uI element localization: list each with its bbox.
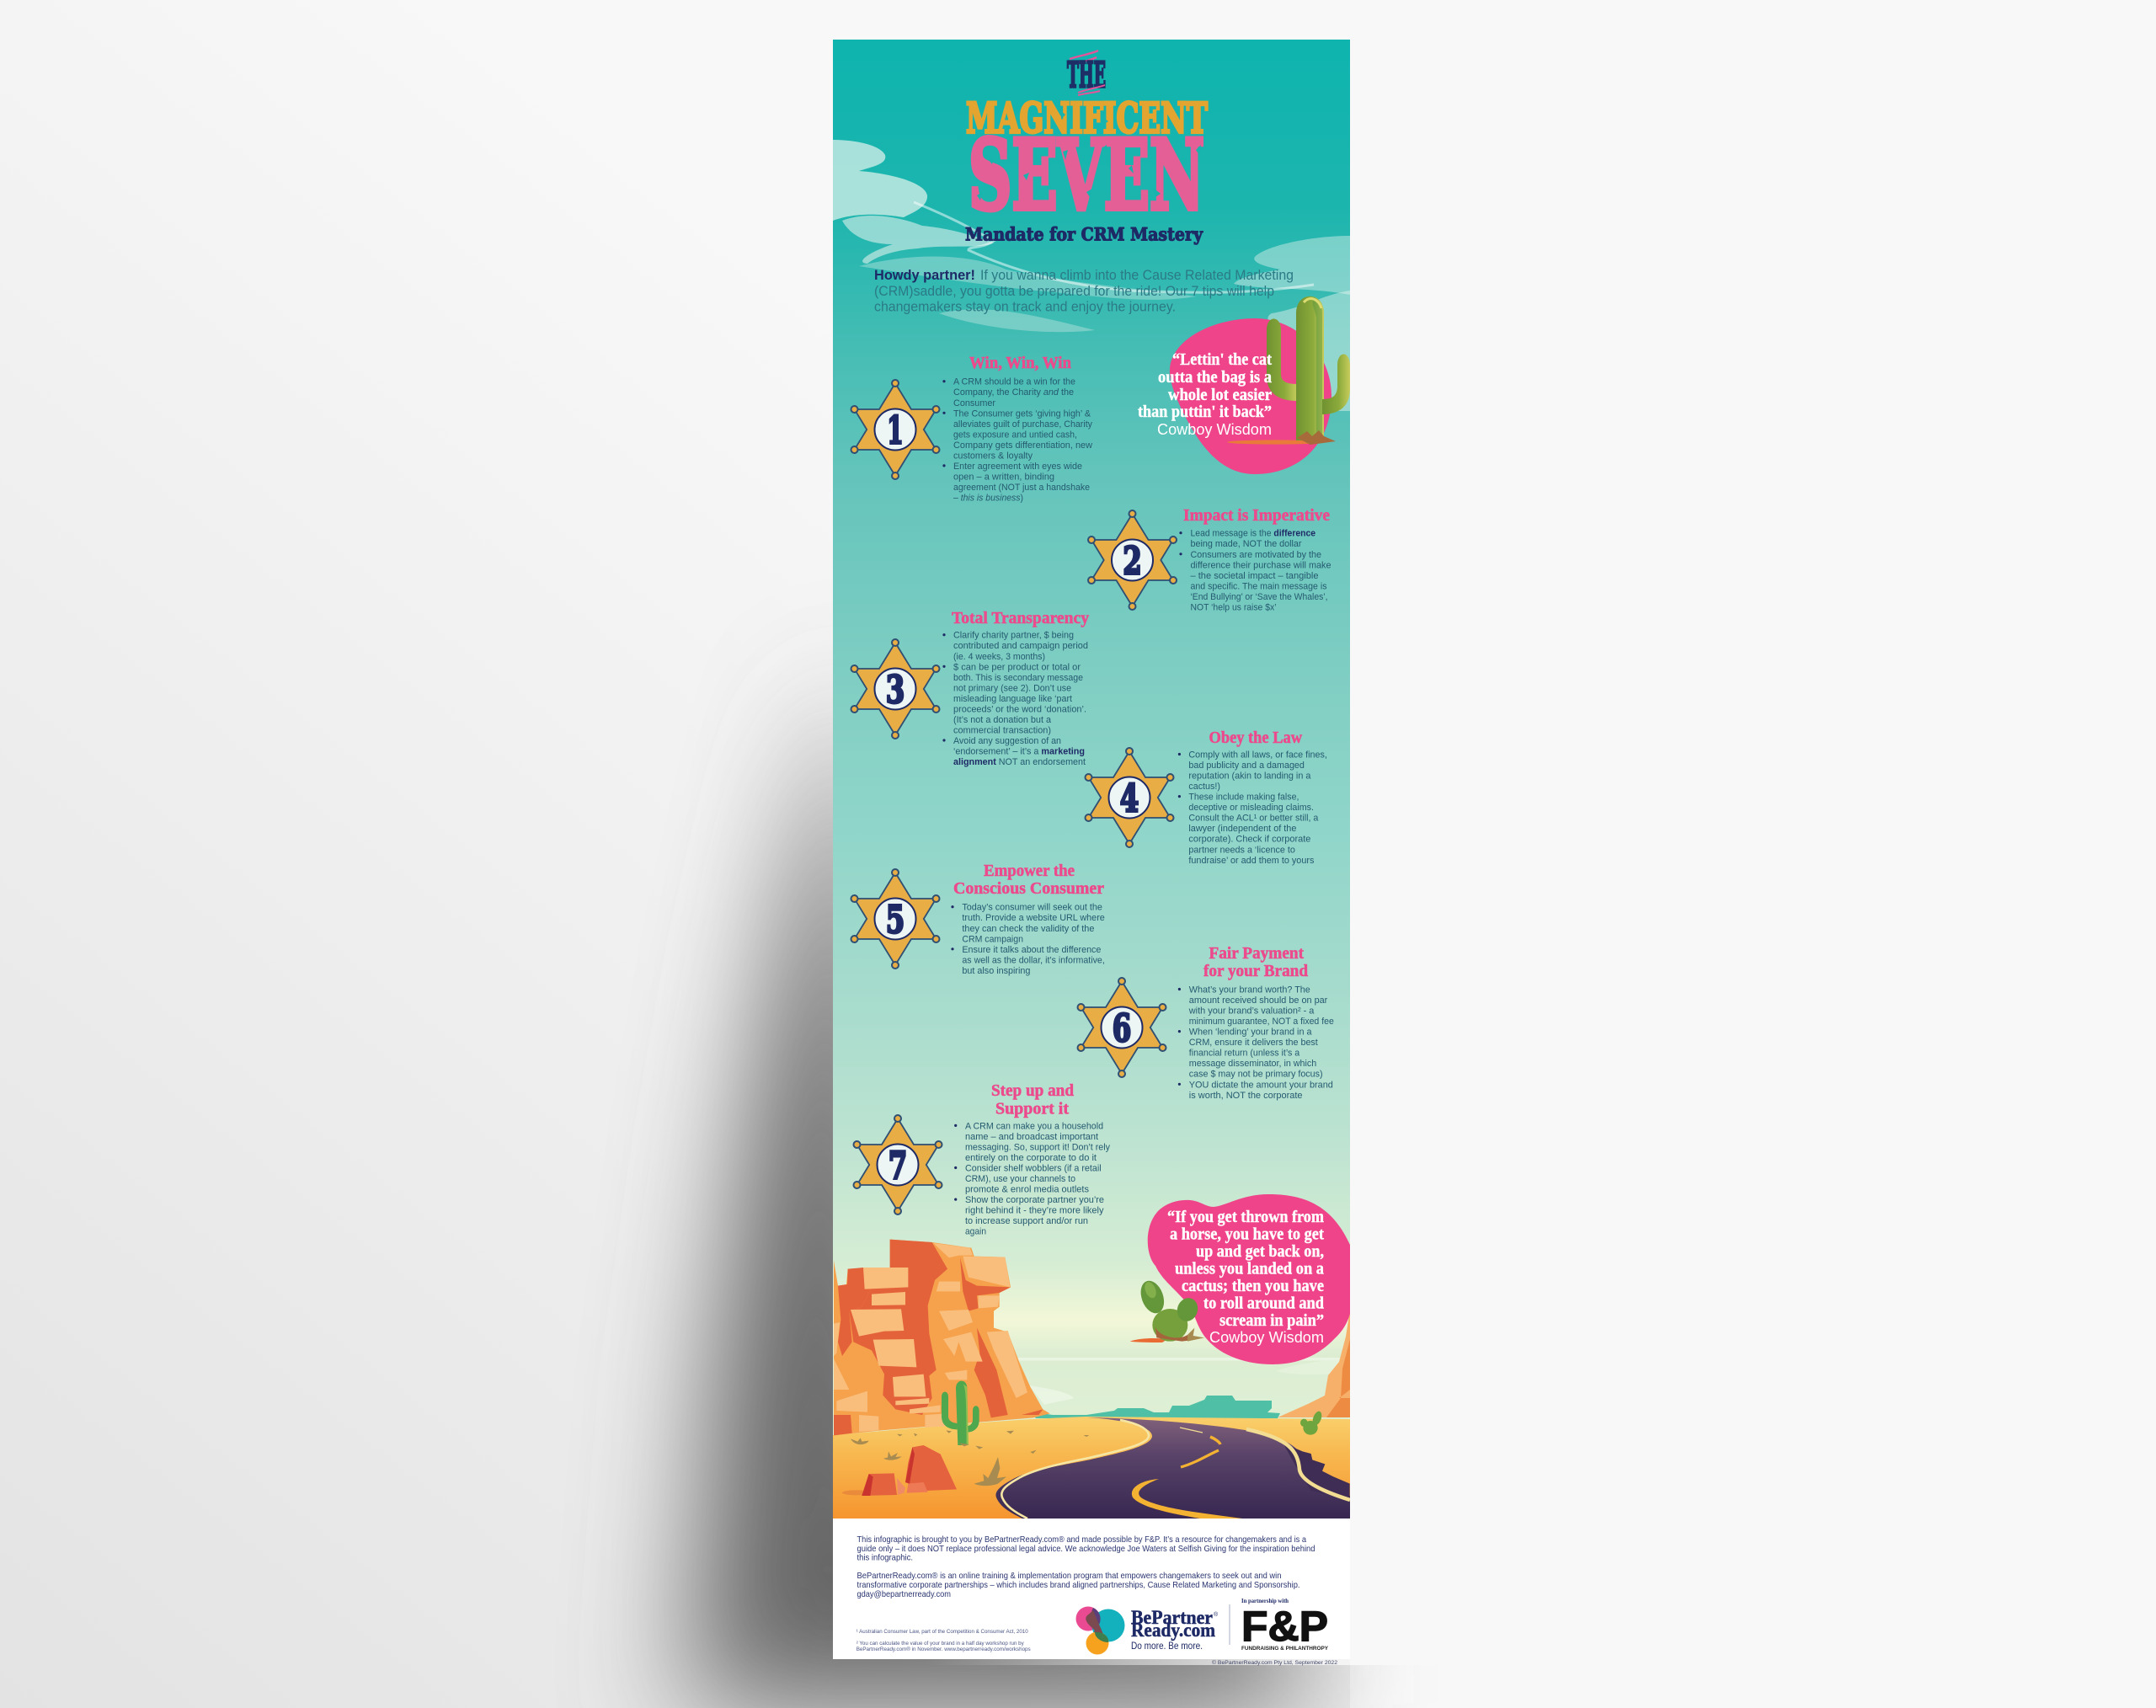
- acknowledgement text: This infographic is brought to you by BePartnerReady.com® and made possible by F&P. It’s a resource for changemakers and is a: [857, 1535, 1306, 1545]
- title: THE: [1067, 54, 1106, 96]
- about text: [857, 1572, 1300, 1599]
- bullet list: What’s your brand worth? The: [1189, 985, 1310, 995]
- tip 7: [854, 1082, 1110, 1237]
- icon: sheriff star 1: [851, 380, 940, 479]
- bullet list: being made, NOT the dollar: [1191, 539, 1302, 549]
- bullet list: Lead message is the difference: [1191, 529, 1315, 539]
- heading: Conscious Consumer: [953, 880, 1104, 898]
- title: SEVEN: SEVEN: [969, 119, 1204, 232]
- bullet list: entirely on the corporate to do it: [965, 1153, 1097, 1163]
- heading: Support it: [995, 1100, 1070, 1118]
- poster: [833, 40, 1350, 1659]
- right rock: [1278, 1310, 1350, 1417]
- icon: sheriff star 3: 3: [886, 668, 905, 713]
- heading: [953, 862, 1104, 898]
- about text: gday@bepartnerready.com: [857, 1590, 951, 1599]
- tip 5: [851, 862, 1105, 976]
- bullet list: Clarify charity partner, $ being: [953, 631, 1074, 641]
- heading: [991, 1082, 1074, 1118]
- bullet list: lawyer (independent of the: [1188, 824, 1296, 834]
- bullet list: alleviates guilt of purchase, Charity: [953, 419, 1092, 430]
- bullet list: These include making false,: [1188, 793, 1299, 803]
- bullet list: message disseminator, in which: [1189, 1059, 1316, 1069]
- bullet list: (ie. 4 weeks, 3 months): [953, 652, 1045, 662]
- bullet list: – the societal impact – tangible: [1191, 571, 1319, 581]
- bullet list: Consumer: [953, 398, 995, 408]
- quote text: scream in pain”: [1219, 1312, 1324, 1330]
- logo wordmark: Ready.com: [1131, 1620, 1215, 1641]
- bullet list: and specific. The main message is: [1191, 581, 1327, 591]
- road edge lines: [1001, 1420, 1149, 1519]
- bullet list: Comply with all laws, or face fines,: [1188, 750, 1327, 760]
- icon: tall cactus: [1227, 296, 1350, 445]
- bullet list: [942, 631, 1088, 767]
- icon: sheriff star 1: 1: [887, 408, 904, 452]
- horizon haze: [1015, 1358, 1350, 1405]
- quote text: “Lettin' the cat: [1172, 351, 1272, 369]
- title: [965, 51, 1208, 246]
- quote text: to roll around and: [1203, 1295, 1324, 1312]
- quote 1 callout: [1138, 296, 1350, 474]
- bullet list: promote & enrol media outlets: [965, 1185, 1089, 1195]
- bullet list: [942, 377, 1093, 504]
- infographic mockup: [0, 40, 1374, 1708]
- bullet list: $ can be per product or total or: [953, 662, 1081, 672]
- quote text: Cowboy Wisdom: [1209, 1329, 1324, 1346]
- bullet list: name – and broadcast important: [965, 1132, 1099, 1142]
- sand ground: [833, 1417, 1350, 1519]
- tip 1: [851, 355, 1093, 504]
- bullet list: NOT ‘help us raise $x’: [1191, 602, 1277, 612]
- logo: F&P: F&P: [1241, 1603, 1328, 1650]
- about text: BePartnerReady.com® is an online training & implementation program that empowers changemakers to seek out and win: [857, 1572, 1282, 1581]
- bullet list: corporate). Check if corporate: [1188, 835, 1310, 845]
- intro text: If you wanna climb into the Cause Related Marketing: [980, 267, 1294, 283]
- bullet list: – this is business): [953, 494, 1023, 504]
- bullet list: A CRM should be a win for the: [953, 377, 1075, 387]
- bullet list: partner needs a ‘licence to: [1188, 845, 1295, 855]
- quote text: whole lot easier: [1168, 387, 1272, 404]
- quote text: [1167, 1209, 1324, 1346]
- quote text: cactus; then you have: [1182, 1278, 1324, 1295]
- bullet list: Ensure it talks about the difference: [962, 945, 1101, 955]
- bullet list: but also inspiring: [962, 966, 1030, 976]
- bullet list: not primary (see 2). Don’t use: [953, 683, 1071, 693]
- bullet list: right behind it - they’re more likely: [965, 1206, 1104, 1216]
- icon: sheriff star 4: [1085, 748, 1174, 847]
- icon: sheriff star 4: 4: [1120, 777, 1139, 821]
- copyright line: © BePartnerReady.com Pty Ltd, September 2022: [1212, 1659, 1337, 1666]
- quote text: Cowboy Wisdom: [1157, 421, 1272, 438]
- bullet list: they can check the validity of the: [962, 924, 1094, 934]
- bullet list: CRM campaign: [962, 934, 1023, 944]
- bullet list: [951, 903, 1105, 976]
- subtitle: Mandate for CRM Mastery: [965, 224, 1203, 246]
- quote text: unless you landed on a: [1175, 1260, 1324, 1278]
- quote text: outta the bag is a: [1158, 369, 1272, 387]
- bullet list: Show the corporate partner you’re: [965, 1195, 1104, 1205]
- icon: sheriff star 7: [854, 1115, 942, 1214]
- heading: Empower the: [984, 862, 1075, 880]
- small right cactus: [1300, 1410, 1323, 1435]
- logo wordmark: [1131, 1607, 1219, 1652]
- title flourish bottom: [1078, 85, 1105, 95]
- acknowledgement text: this infographic.: [857, 1553, 913, 1563]
- icon: sheriff star 3: [851, 639, 940, 739]
- bullet list: cactus!): [1188, 782, 1220, 792]
- icon: sheriff star 2: [1088, 510, 1177, 610]
- bullet list: bad publicity and a damaged: [1188, 761, 1305, 771]
- intro text: Howdy partner!: [874, 267, 975, 283]
- bullet list: alignment NOT an endorsement: [953, 757, 1086, 767]
- bullet list: truth. Provide a website URL where: [962, 913, 1105, 923]
- logo: F&P: FUNDRAISING & PHILANTHROPY: [1241, 1646, 1329, 1652]
- quote text: “If you get thrown from: [1167, 1209, 1324, 1226]
- bullet list: misleading language like ‘part: [953, 694, 1073, 704]
- bullet list: difference their purchase will make: [1191, 560, 1331, 570]
- logo wordmark: Do more. Be more.: [1131, 1640, 1203, 1652]
- bullet list: is worth, NOT the corporate: [1189, 1091, 1302, 1101]
- bullet list: Today’s consumer will seek out the: [962, 903, 1102, 913]
- heading: Obey the Law: [1209, 729, 1302, 747]
- quote text: [1138, 351, 1272, 438]
- icon: sheriff star 5: [851, 869, 940, 969]
- icon: sheriff star 6: 6: [1113, 1006, 1131, 1051]
- intro text: changemakers stay on track and enjoy the journey.: [874, 298, 1176, 315]
- footnotes: BePartnerReady.com® in November. www.bepartnerready.com/workshops: [857, 1646, 1031, 1652]
- intro text: (CRM)saddle, you gotta be prepared for the ride! Our 7 tips will help: [874, 283, 1274, 299]
- heading: Impact is Imperative: [1183, 507, 1330, 525]
- icon: sheriff star 2: 2: [1123, 539, 1142, 584]
- bullet list: deceptive or misleading claims.: [1188, 803, 1314, 813]
- quote text: up and get back on,: [1196, 1243, 1324, 1261]
- bullet list: ‘endorsement’ – it’s a marketing: [953, 746, 1085, 756]
- bullet list: [1178, 750, 1327, 866]
- intro text: [874, 267, 1294, 315]
- bullet list: as well as the dollar, it’s informative,: [962, 955, 1105, 965]
- bullet list: open – a written, binding: [953, 472, 1054, 482]
- bullet list: YOU dictate the amount your brand: [1189, 1080, 1333, 1090]
- logo wordmark: BePartner: [1131, 1607, 1213, 1628]
- bullet list: again: [965, 1227, 986, 1237]
- desert shrubs: [851, 1430, 1089, 1486]
- pink blob: [1148, 1194, 1350, 1364]
- heading: for your Brand: [1203, 963, 1308, 980]
- foreground rocks: [842, 1445, 957, 1496]
- bullet list: Consumers are motivated by the: [1191, 550, 1321, 560]
- clouds: [833, 140, 1350, 411]
- bullet list: [1178, 985, 1334, 1101]
- title flourish top: [1070, 51, 1098, 64]
- desert scene: [833, 1240, 1350, 1519]
- heading: Win, Win, Win: [969, 355, 1071, 372]
- icon: sheriff star 6: [1078, 978, 1166, 1077]
- bullet list: CRM, ensure it delivers the best: [1189, 1038, 1319, 1048]
- footnotes: ² You can calculate the value of your brand in a half day workshop run by: [857, 1641, 1024, 1647]
- heading: Step up and: [991, 1082, 1074, 1100]
- left rock formation: [834, 1240, 1050, 1435]
- bullet list: [1179, 529, 1331, 612]
- tip 3: [851, 610, 1089, 767]
- bullet list: Company gets differentiation, new: [953, 440, 1093, 451]
- poster drop shadow: [686, 0, 1603, 1708]
- tip 6: [1078, 945, 1334, 1101]
- ragged road edge: [1283, 1443, 1350, 1499]
- icon: sheriff star 7: 7: [889, 1144, 907, 1188]
- logo: BePartnerReady: [1076, 1607, 1219, 1654]
- road centre dashes: [1180, 1428, 1203, 1433]
- bullet list: proceeds’ or the word ‘donation’.: [953, 704, 1086, 714]
- logo wordmark: ®: [1214, 1611, 1219, 1618]
- bullet list: Consult the ACL¹ or better still, a: [1188, 814, 1319, 824]
- bullet list: case $ may not be primary focus): [1189, 1070, 1323, 1080]
- bullet list: CRM), use your channels to: [965, 1174, 1075, 1184]
- logo circles: [1076, 1607, 1125, 1654]
- tip 4: [1085, 729, 1327, 866]
- footnotes: [857, 1629, 1031, 1652]
- bullet list: amount received should be on par: [1189, 995, 1327, 1006]
- bullet list: contributed and campaign period: [953, 641, 1088, 651]
- footer panel: [833, 1519, 1350, 1659]
- distant mesa: [1029, 1396, 1280, 1418]
- bullet list: commercial transaction): [953, 726, 1051, 736]
- title distress marks: [977, 111, 1201, 200]
- bullet list: Enter agreement with eyes wide: [953, 462, 1082, 472]
- bullet list: Consider shelf wobblers (if a retail: [965, 1164, 1102, 1174]
- bullet list: customers & loyalty: [953, 451, 1033, 461]
- bullet list: Company, the Charity and the: [953, 387, 1074, 398]
- road: [995, 1417, 1350, 1519]
- logo: F&P: In partnership with: [1241, 1598, 1289, 1604]
- quote text: a horse, you have to get: [1170, 1226, 1324, 1243]
- bullet list: [954, 1121, 1110, 1237]
- heading: [1203, 945, 1308, 980]
- title: MAGNIFICENT: MAGNIFICENT: [966, 93, 1208, 143]
- bullet list: gets exposure and untied cash,: [953, 430, 1077, 440]
- pink blob: [1170, 318, 1331, 474]
- bullet list: agreement (NOT just a handshake: [953, 483, 1090, 493]
- quote text: than puttin' it back”: [1138, 403, 1272, 421]
- bullet list: with your brand’s valuation² - a: [1188, 1006, 1315, 1017]
- bullet list: reputation (akin to landing in a: [1188, 771, 1311, 782]
- bullet list: The Consumer gets ‘giving high’ &: [953, 408, 1091, 419]
- bullet list: minimum guarantee, NOT a fixed fee: [1189, 1017, 1334, 1027]
- acknowledgement text: [857, 1535, 1315, 1563]
- icon: sheriff star 5: 5: [886, 898, 905, 942]
- prickly pear cactus: [1130, 1278, 1204, 1342]
- bullet list: fundraise’ or add them to yours: [1188, 856, 1315, 866]
- bullet list: ‘End Bullying’ or ‘Save the Whales’,: [1191, 592, 1327, 602]
- sky gradient: [833, 40, 1350, 1522]
- bullet list: to increase support and/or run: [965, 1216, 1088, 1226]
- bullet list: both. This is secondary message: [953, 673, 1083, 683]
- bullet list: (It’s not a donation but a: [953, 715, 1052, 725]
- desert cactus: [942, 1381, 979, 1445]
- about text: transformative corporate partnerships – which includes brand aligned partnerships, Cause Related Marketing and Sponsorship.: [857, 1581, 1300, 1590]
- footnotes: ¹ Australian Consumer Law, part of the Competition & Consumer Act, 2010: [857, 1629, 1028, 1635]
- tip 2: [1088, 507, 1331, 612]
- bullet list: When ‘lending’ your brand in a: [1189, 1027, 1312, 1038]
- bullet list: messaging. So, support it! Don’t rely: [965, 1142, 1110, 1152]
- bullet list: financial return (unless it’s a: [1189, 1049, 1300, 1059]
- heading: Fair Payment: [1209, 945, 1304, 963]
- heading: Total Transparency: [952, 610, 1089, 627]
- bullet list: Avoid any suggestion of an: [953, 736, 1061, 746]
- quote 2 callout: [1130, 1194, 1350, 1364]
- acknowledgement text: guide only – it does NOT replace professional legal advice. We acknowledge Joe Waters at Selfish Giving for the inspiration behind: [857, 1545, 1315, 1554]
- bullet list: A CRM can make you a household: [965, 1121, 1103, 1131]
